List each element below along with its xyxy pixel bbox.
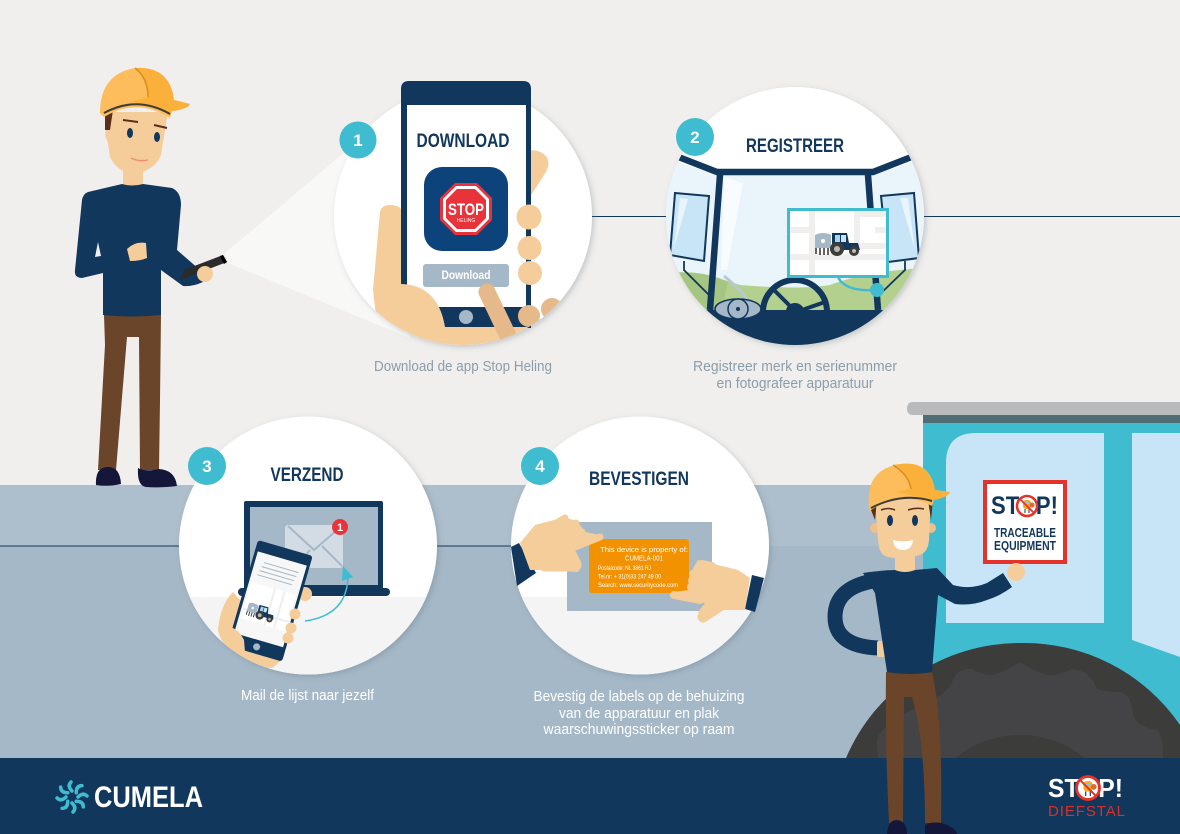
hand (197, 266, 213, 282)
tractor tyre (846, 643, 1180, 758)
phone (227, 540, 313, 662)
caption: Bevestig de labels op de behuizing (534, 689, 744, 705)
phone tractor (245, 602, 276, 623)
logo: cumela (57, 781, 203, 814)
steering wheel (763, 280, 827, 319)
pointing hand (1007, 563, 1025, 581)
arrow (305, 566, 353, 621)
worker with phone (75, 68, 410, 487)
number badge: 1 (353, 131, 363, 150)
cable dot (870, 283, 884, 297)
photo screen (788, 210, 888, 276)
download button (423, 264, 509, 287)
hard hat (100, 68, 190, 118)
head (105, 110, 168, 174)
heading: BEVESTIGEN (589, 469, 689, 490)
envelope: 1 (337, 522, 343, 534)
torso (863, 568, 1012, 674)
cab view (666, 154, 924, 345)
circle (334, 87, 592, 345)
logo: stop diefstal (1048, 773, 1125, 820)
hand (373, 204, 563, 350)
heading: REGISTREER (746, 136, 844, 157)
legs (98, 315, 161, 470)
legs (886, 672, 941, 823)
app icon: STOP (448, 200, 484, 219)
app icon: HELING (457, 218, 475, 224)
floor (190, 597, 426, 674)
shoes (887, 820, 957, 834)
caption (693, 359, 897, 392)
number badge (340, 122, 376, 158)
footer bar (0, 758, 1180, 834)
number badge (676, 118, 714, 156)
wrist (127, 243, 147, 261)
left arm (835, 581, 878, 648)
logo: stop diefstal: STOP! (1048, 773, 1123, 803)
laptop (238, 501, 390, 596)
light beam (225, 141, 410, 338)
circle (511, 416, 769, 674)
step 3 panel (170, 416, 450, 704)
connector lines (0, 216, 1180, 546)
hand behind phone (218, 587, 312, 668)
hand on hip (877, 641, 887, 657)
hand (218, 608, 300, 670)
mirrors (670, 193, 919, 296)
orange label: Search: www.securitycode.com (598, 582, 678, 589)
caption: Registreer merk en serienummer (693, 359, 897, 375)
cable (838, 277, 877, 290)
logo: cumela: CUMELA (94, 781, 203, 814)
phone (180, 255, 227, 280)
gauges (715, 299, 761, 319)
shoes (96, 467, 177, 487)
caption: waarschuwingssticker op raam (543, 722, 734, 738)
heading: DOWNLOAD (416, 131, 510, 152)
step 1 panel (334, 81, 592, 375)
neck (123, 170, 143, 186)
hand behind phone (531, 150, 548, 196)
arm gap (95, 242, 101, 257)
orange label: This device is property of: (600, 545, 688, 554)
sticker: stop traceable equipment: TRACEABLE (994, 525, 1056, 540)
hard hat (869, 464, 950, 513)
sticker: stop traceable equipment: STOP! (991, 492, 1058, 520)
tractor cab (907, 402, 1180, 758)
head (870, 497, 936, 558)
step 2 panel (660, 87, 930, 392)
caption: van de apparatuur en plak (559, 706, 720, 722)
ground band (0, 485, 1180, 758)
envelope (285, 519, 348, 568)
circle (179, 416, 437, 674)
phone (401, 81, 531, 328)
left hand (511, 517, 600, 586)
neck (895, 555, 915, 573)
number badge (188, 447, 226, 485)
caption: en fotografeer apparatuur (716, 376, 874, 392)
app icon (424, 167, 508, 251)
orange label (589, 539, 689, 593)
floor (522, 597, 751, 674)
step 4 panel (505, 416, 775, 738)
caption (534, 689, 744, 738)
sticker: stop traceable equipment: EQUIPMENT (994, 538, 1056, 553)
housing (567, 522, 712, 611)
torso and arms (75, 184, 203, 316)
number badge: 2 (690, 128, 700, 147)
orange label: Tel.nr: + 31(0)33 247 49 00 (598, 574, 661, 580)
orange label: CUMELA-001 (625, 554, 663, 562)
number badge: 3 (202, 457, 212, 476)
number badge (521, 447, 559, 485)
worker pointing at sticker (835, 464, 1025, 834)
download button: Download (442, 270, 490, 282)
orange label: Postalcode: NL 3861 RJ (598, 565, 651, 572)
logo: stop diefstal: DIEFSTAL (1048, 803, 1125, 820)
circle (666, 87, 924, 345)
caption: Mail de lijst naar jezelf (241, 688, 375, 704)
number badge: 4 (535, 457, 545, 476)
sticker: stop traceable equipment (985, 482, 1065, 562)
caption: Download de app Stop Heling (374, 359, 552, 375)
heading: VERZEND (270, 465, 344, 486)
right hand (672, 560, 764, 622)
